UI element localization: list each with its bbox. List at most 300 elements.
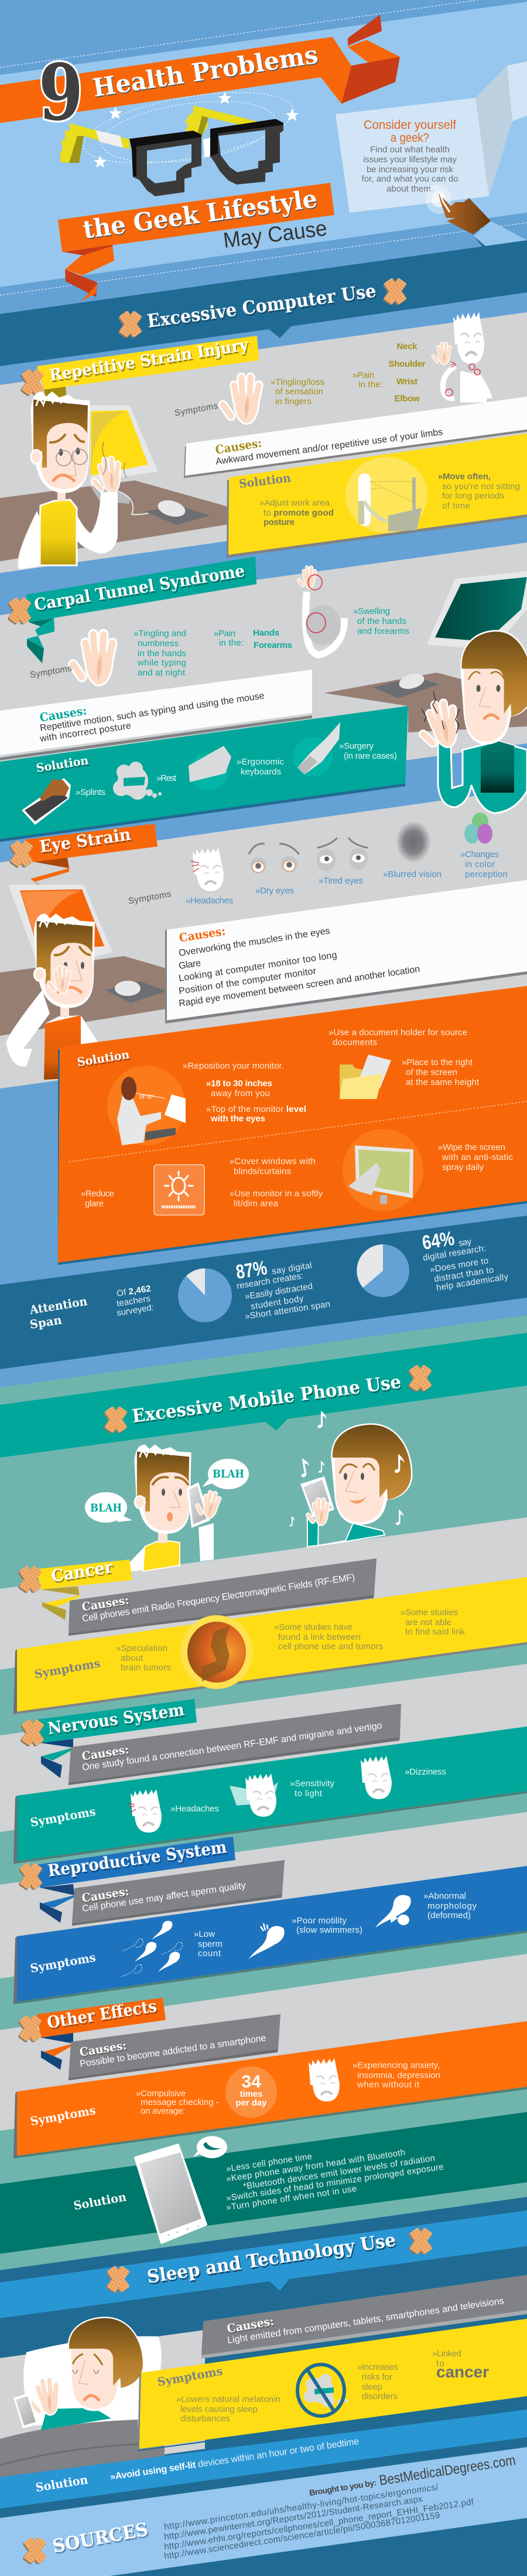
panel: cancer <box>13 1557 527 1714</box>
stat: 34 times per day: times <box>240 2089 262 2099</box>
banner <box>25 824 158 862</box>
text: reposition monitor: »Top of the monitor level <box>206 1104 306 1114</box>
text: 87 percent: »Easily distracted <box>244 1281 313 1302</box>
panel: carpal tunnel syndrome <box>0 557 527 862</box>
causes bar <box>0 670 312 760</box>
text: some studies have: »Some studies have <box>274 1622 353 1632</box>
icon: scalpel <box>293 722 340 777</box>
text: solution list: »Switch sides of head to minimize prolonged exposure <box>225 2162 444 2203</box>
label: symptoms: Symptoms <box>29 1804 97 1830</box>
text: source links: http://www.pewinternet.org/Reports/2012/Student-Research.aspx <box>163 2494 423 2542</box>
callout text: a geek? <box>391 131 429 145</box>
label: symptoms: Symptoms <box>29 2103 97 2128</box>
text: increases risks: sleep <box>362 2382 382 2392</box>
text: headaches: »Headaches <box>170 1804 219 1814</box>
text: 64 percent: help academically <box>436 1272 509 1293</box>
heading: Cancer <box>50 1557 115 1586</box>
solution heading: Solution <box>35 753 90 775</box>
text: rest: »Rest <box>156 773 177 783</box>
text: symptoms row <box>186 849 508 906</box>
icon: deformed sperm <box>375 1895 411 1928</box>
text: abnormal morphology <box>423 1891 477 1920</box>
text: reduce glare: »Reduce <box>81 1189 114 1199</box>
icon: wiped monitor <box>343 1129 423 1211</box>
stat: 34 times per day <box>225 2066 277 2118</box>
panel: eye strain <box>0 813 527 1265</box>
panel: reproductive system <box>13 1837 527 2004</box>
text: linked to cancer: to <box>436 2359 444 2369</box>
text: tingling and numbness: in the hands <box>138 649 186 658</box>
causes list: Position of the computer monitor <box>178 966 317 997</box>
solution text: »Avoid using self-lit devices within an hour or two of bedtime <box>109 2437 360 2482</box>
character: eye strain geek <box>6 915 100 1080</box>
text: symptoms row: »Changes <box>460 849 499 859</box>
callout text: be increasing your risk <box>367 165 453 175</box>
causes list: Overworking the muscles in the eyes <box>178 926 331 958</box>
text: low sperm count: count <box>198 1949 221 1959</box>
text: 87 percent: 87% <box>234 1257 269 1284</box>
text: pain locations: Shoulder <box>389 359 426 369</box>
text: poor motility: »Poor motility <box>292 1916 347 1926</box>
icon: hand <box>69 631 116 684</box>
icon: monitor distance: 18″-30″ <box>139 1094 155 1100</box>
text: source links: http://www.princeton.edu/uhs/healthy-living/hot-topics/ergonomics/ <box>163 2482 439 2532</box>
heading: Excessive Computer Use <box>146 280 378 332</box>
icon: anxious face <box>309 2058 340 2101</box>
text: linked to cancer <box>432 2349 489 2381</box>
text: adjust work area <box>259 498 334 527</box>
yellow symptom panel <box>138 2319 527 2451</box>
text: symptoms row: »Blurred vision <box>383 869 442 879</box>
causes text: Cell phone use may affect sperm quality <box>81 1881 247 1914</box>
speech bubble: smile <box>193 2136 227 2158</box>
icon: pointing hand <box>426 185 527 290</box>
text: melatonin: disturbances <box>180 2414 230 2424</box>
text: surgery: »Surgery <box>339 741 374 751</box>
text: place to the right: of the screen <box>406 1067 457 1077</box>
text: increases risks <box>357 2362 398 2401</box>
background: light teal mobile section <box>0 1315 527 2270</box>
causes label: Causes: <box>226 2314 275 2336</box>
text: wipe the screen: with an anti-static <box>442 1152 513 1162</box>
ribbon tail <box>40 2033 73 2070</box>
solution heading: Solution <box>238 470 292 491</box>
causes label: Causes: <box>81 1593 130 1614</box>
text: 87 percent <box>234 1257 331 1322</box>
bandage <box>18 1862 43 1891</box>
text: 87 percent: »Short attention span <box>244 1299 331 1322</box>
text: place to the right: at the same height <box>406 1077 480 1087</box>
icon: sensitivity to light <box>230 1773 278 1817</box>
causes label: Causes: <box>81 1884 130 1905</box>
causes list <box>178 926 420 1009</box>
text: increases risks: disorders <box>362 2391 398 2401</box>
text: experiencing anxiety: when without it <box>357 2080 420 2090</box>
text: compulsive checking: »Compulsive <box>136 2089 186 2099</box>
text: tingling and numbness: while typing <box>137 658 186 668</box>
text: low sperm count <box>194 1929 223 1959</box>
text: swelling: of the hands <box>357 616 406 626</box>
text: speculation: brain tumors <box>121 1663 171 1673</box>
speech bubble: blah right: BLAH <box>213 1468 244 1480</box>
callout text: Find out what health <box>370 145 450 155</box>
solution heading: Solution <box>35 2472 89 2495</box>
text: tingling and numbness: »Tingling and <box>134 629 186 639</box>
heading: Repetitive Strain Injury <box>48 336 250 385</box>
banner <box>37 1998 166 2038</box>
text: experiencing anxiety: insomnia, depression <box>357 2070 440 2080</box>
text: teachers surveyed: surveyed: <box>116 1302 155 1318</box>
causes bar <box>165 880 527 1023</box>
text: solution list: »Less cell phone time <box>225 2151 313 2174</box>
bandage <box>22 2537 47 2565</box>
text: pain in the: in the: <box>219 638 244 648</box>
text: swelling: and forearms <box>357 626 409 636</box>
icon: swollen arm <box>297 566 344 655</box>
text: reposition monitor: »Reposition your monitor. <box>183 1061 284 1071</box>
callout text: about them. <box>386 184 433 194</box>
text: some studies not able <box>401 1608 465 1637</box>
heading: Sleep and Technology Use <box>146 2229 397 2288</box>
causes bar <box>184 397 527 478</box>
heading: Carpal Tunnel Syndrome <box>33 561 246 615</box>
text: pain in the: in the: <box>358 380 383 390</box>
text: ergonomic keyboards: keyboards <box>241 767 281 777</box>
heading: sources: SOURCES <box>51 2519 150 2557</box>
heading: Excessive Mobile Phone Use <box>131 1371 402 1427</box>
icon: dizziness <box>361 1756 392 1799</box>
text: wipe the screen: »Wipe the screen <box>438 1142 505 1152</box>
text: speculation <box>116 1643 171 1673</box>
text: low sperm count: sperm <box>198 1939 223 1949</box>
section banner: sleep and technology use <box>0 2210 527 2318</box>
text: speculation: about <box>121 1653 143 1663</box>
icon: colour circles <box>464 813 492 844</box>
text: some studies not able: to find said link <box>405 1627 465 1637</box>
text: pain in the <box>214 628 292 650</box>
causes text: Awkward movement and/or repetitive use of your limbs <box>215 427 443 467</box>
subheading: may cause: May Cause <box>222 216 328 253</box>
text: 87 percent: say digital <box>271 1260 313 1277</box>
causes panel <box>72 1860 285 1926</box>
causes text: Light emitted from computers, tablets, smartphones and televisions <box>227 2296 505 2346</box>
text: sensitivity: to light <box>295 1789 323 1799</box>
text: reposition monitor: with the eyes <box>210 1114 265 1124</box>
text: pain in the: Hands <box>253 628 279 638</box>
icon: blurred vision <box>396 821 431 863</box>
text: pain in the: Forearms <box>254 640 292 650</box>
heading: Other Effects <box>46 1996 158 2032</box>
text: increases risks: »Increases <box>357 2362 398 2372</box>
text: move often: of time <box>442 501 470 511</box>
banner tail <box>30 857 69 895</box>
causes label: Causes: <box>81 1742 130 1763</box>
causes panel <box>201 2275 527 2359</box>
label: symptoms: Symptoms <box>128 889 172 906</box>
text: wipe the screen <box>438 1142 513 1172</box>
callout: consider yourself a geek <box>336 62 527 290</box>
text: symptoms row: in color <box>465 859 495 869</box>
text: cover windows: »Use monitor in a softly <box>230 1189 323 1199</box>
section banner: excessive mobile phone use <box>0 1333 527 1458</box>
causes label: Causes: <box>178 924 227 945</box>
bandage <box>9 840 33 868</box>
text: tingling: of sensation <box>275 387 323 397</box>
panel: repetitive strain injury <box>0 312 527 569</box>
yellow symptom panel <box>15 1577 527 1712</box>
ribbon tail <box>40 1586 80 1620</box>
text: some studies have: cell phone use and tumors <box>278 1642 383 1652</box>
text: sensitivity: »Sensitivity <box>290 1779 335 1789</box>
text: solution list: »Keep phone away from head with Bluetooth <box>225 2147 406 2184</box>
solution panel <box>0 706 408 842</box>
text: tingling: »Tingling/loss <box>271 377 324 387</box>
text: 64 percent: »Does more to <box>429 1255 489 1275</box>
background: gray band three <box>0 789 527 1089</box>
text: pain locations: Wrist <box>396 377 418 387</box>
solution heading: Solution <box>76 1047 131 1069</box>
bandage icon right <box>382 278 407 306</box>
background: gray band one <box>0 312 527 573</box>
solution panel <box>58 986 527 1265</box>
section banner: excessive computer use <box>0 240 527 366</box>
banner <box>37 336 259 390</box>
heading: Eye Strain <box>38 824 132 857</box>
text: poor motility <box>292 1916 362 1935</box>
text: compulsive checking: on average: <box>141 2106 185 2116</box>
text: some studies not able: »Some studies <box>401 1608 458 1618</box>
text: pain locations: Elbow <box>395 394 420 404</box>
bandage icon left <box>118 311 142 339</box>
icon: folder <box>340 1055 391 1099</box>
causes panel <box>69 2014 280 2080</box>
callout text: for, and what you can do <box>362 174 458 184</box>
text: reposition monitor: away from you <box>211 1089 270 1098</box>
text: pain locations: Neck <box>397 342 418 352</box>
text: document holder: »Use a document holder for source <box>328 1028 467 1038</box>
text: some studies have <box>274 1622 383 1652</box>
icon: brain tumor <box>180 1615 253 1689</box>
banner <box>37 1560 132 1589</box>
text: 87 percent: student body <box>250 1294 304 1312</box>
text: move often: so you're not sitting <box>442 482 520 492</box>
scene: bedroom wall <box>0 2330 205 2477</box>
text: adjust work area: »Adjust work area <box>259 498 330 508</box>
label: symptoms: Symptoms <box>174 401 219 418</box>
icon: smartphone <box>135 2145 206 2243</box>
text: ergonomic keyboards: »Ergonomic <box>237 757 285 767</box>
text: cover windows: blinds/curtains <box>234 1166 291 1176</box>
text: document holder: documents <box>333 1038 377 1048</box>
causes text: with incorrect posture <box>39 721 132 744</box>
heading: Attention <box>28 1294 88 1317</box>
bandage icon left <box>103 1406 128 1434</box>
panel: nervous system <box>13 1699 527 1864</box>
ribbon tail <box>40 1739 73 1778</box>
text: compulsive checking: message checking - <box>141 2097 219 2107</box>
text: surgery: (in rare cases) <box>344 751 397 761</box>
text: 64 percent: 64% <box>420 1227 456 1254</box>
label: symptoms: Symptoms <box>29 1950 97 1975</box>
background: dark blue lower section <box>0 2197 527 2576</box>
text: linked to cancer: »Linked <box>432 2349 461 2359</box>
label: symptoms: Symptoms <box>156 2364 224 2389</box>
text: increases risks: risks for <box>362 2372 392 2382</box>
text: adjust work area: posture <box>264 517 295 527</box>
icon: no sleep <box>297 2365 348 2416</box>
bandage <box>18 1565 42 1594</box>
text: swelling: »Swelling <box>353 606 390 616</box>
text: surgery <box>339 741 397 761</box>
text: tingling <box>271 377 324 407</box>
character: talking geek <box>129 1445 222 1571</box>
text: ergonomic keyboards <box>237 757 285 777</box>
text: tingling: in fingers <box>275 397 312 407</box>
icon: poor motility <box>249 1923 285 1959</box>
panel: sleep <box>0 2275 527 2509</box>
text: some studies have: found a link between <box>278 1632 361 1642</box>
scene: blanket <box>0 2420 165 2477</box>
heading: Reproductive System <box>47 1837 228 1881</box>
heading: Nervous System <box>46 1700 186 1738</box>
solution heading: Solution <box>73 2189 128 2213</box>
text: teachers surveyed <box>116 1284 155 1318</box>
text: sensitivity <box>290 1779 335 1799</box>
text: source links: http://www.sciencedirect.com/science/article/pii/S0003687012001159 <box>163 2510 440 2561</box>
text: solution list: »Turn phone off when not in use <box>225 2183 357 2213</box>
background strip <box>0 743 527 862</box>
causes panel <box>69 1704 401 1785</box>
text: cover windows: »Cover windows with <box>230 1156 316 1166</box>
icon: headache <box>128 1789 162 1833</box>
figure: white pain figure <box>432 312 492 402</box>
causes text: Possible to become addicted to a smartphone <box>79 2033 267 2069</box>
text: place to the right <box>402 1057 480 1087</box>
icon: posture figure <box>345 457 427 533</box>
text: symptoms row: »Tired eyes <box>319 876 363 886</box>
text: speculation: »Speculation <box>116 1643 167 1653</box>
text: melatonin: levels causing sleep <box>180 2404 258 2414</box>
panel: mobile phone solution <box>0 2112 527 2254</box>
text: solution list: *Bluetooth devices emit lower levels of radiation <box>242 2153 436 2192</box>
text: document holder <box>328 1028 467 1048</box>
text: pain in the <box>353 370 383 390</box>
text: 87 percent: research creates: <box>236 1271 304 1291</box>
text: abnormal morphology: »Abnormal <box>423 1891 466 1901</box>
stat: 34 times per day: per day <box>235 2098 267 2108</box>
causes list: Glare <box>178 958 201 971</box>
causes label: Causes: <box>78 2038 128 2059</box>
solution panel <box>227 434 527 558</box>
text: experiencing anxiety: »Experiencing anxiety, <box>353 2060 440 2070</box>
banner <box>37 1699 197 1743</box>
desk scene <box>0 405 228 561</box>
heading <box>28 1294 88 1332</box>
character: music listener <box>290 1411 411 1547</box>
heading: Span <box>29 1313 63 1332</box>
scene: monitor and desk <box>0 885 166 1036</box>
tablet panel <box>336 62 527 213</box>
numeral nine: 9 <box>39 47 83 138</box>
icon: rest cloud <box>113 762 162 800</box>
text: 64 percent <box>420 1227 509 1293</box>
banner: the geek lifestyle <box>58 183 334 252</box>
icon: low sperm count <box>121 1921 182 1977</box>
character: strained geek <box>18 393 126 569</box>
speech bubble: blah left: BLAH <box>90 1502 122 1514</box>
causes panel <box>69 1558 377 1636</box>
text: teachers surveyed: teachers <box>116 1294 151 1309</box>
text: abnormal morphology: (deformed) <box>427 1910 471 1920</box>
banner: ribbon tail <box>44 387 67 404</box>
callout text: Consider yourself <box>364 118 456 132</box>
icon: tingling hand <box>219 374 262 423</box>
text: melatonin: »Lowers natural melatonin <box>176 2394 280 2404</box>
heading: the geek lifestyle: the Geek Lifestyle <box>81 184 319 244</box>
causes text: Repetitive motion, such as typing and using the mouse <box>39 691 265 733</box>
text: some studies not able: are not able <box>405 1618 451 1628</box>
text: reposition monitor <box>183 1061 306 1124</box>
label: symptoms: Symptoms <box>33 1656 101 1681</box>
bandage <box>18 2015 42 2043</box>
ribbon: lower fold <box>63 245 114 302</box>
text: symptoms row: perception <box>465 869 508 879</box>
text: adjust work area: to promote good <box>264 508 334 518</box>
scene: pillow <box>23 2336 162 2425</box>
label: symptoms: Symptoms <box>29 663 73 680</box>
causes label: Causes: <box>214 436 263 457</box>
text: abnormal morphology: morphology <box>427 1901 477 1911</box>
text: wipe the screen: spray daily <box>442 1162 484 1172</box>
text: symptoms row: »Dry eyes <box>255 886 294 896</box>
banner <box>26 557 256 622</box>
text: linked to cancer: cancer <box>436 2363 489 2381</box>
text: swelling <box>353 606 409 636</box>
panel: other effects <box>13 1996 527 2158</box>
bandage icon right <box>408 1364 432 1393</box>
text: reduce glare <box>81 1189 114 1209</box>
ribbon tail <box>27 618 54 663</box>
callout text <box>362 118 458 194</box>
speech bubble: blah left <box>85 1492 132 1523</box>
panel: attention span <box>0 1216 527 1369</box>
icon: keyboard <box>189 746 231 790</box>
teal symptom panel <box>15 1727 527 1861</box>
banner <box>36 1837 235 1888</box>
causes list: Looking at computer monitor too long <box>178 950 338 984</box>
title block <box>0 15 400 302</box>
bandage <box>7 597 32 625</box>
causes text: Cell phones emit Radio Frequency Electromagnetic Fields (RF-EMF) <box>81 1572 355 1624</box>
text: 64 percent: digital research: <box>422 1243 487 1263</box>
ribbon: top right fold <box>341 15 400 104</box>
chart: pie 64 percent <box>357 1244 409 1297</box>
icon: splint <box>22 778 71 825</box>
text: pain in the: »Pain <box>214 629 235 639</box>
causes list: Rapid eye movement between screen and another location <box>178 964 420 1009</box>
text: move often <box>438 472 520 511</box>
causes label: Causes: <box>39 704 88 725</box>
text: source links <box>163 2482 475 2561</box>
icon: tired eyes <box>317 838 368 871</box>
icon: brightness card <box>154 1165 204 1215</box>
background: gray band two <box>0 543 527 817</box>
icon: headache face <box>191 848 224 891</box>
text: teachers surveyed: Of 2,462 <box>116 1284 152 1299</box>
text: solution list <box>225 2147 444 2213</box>
icon: monitor distance <box>107 1066 186 1145</box>
heading: health problems: Health Problems <box>91 40 320 103</box>
